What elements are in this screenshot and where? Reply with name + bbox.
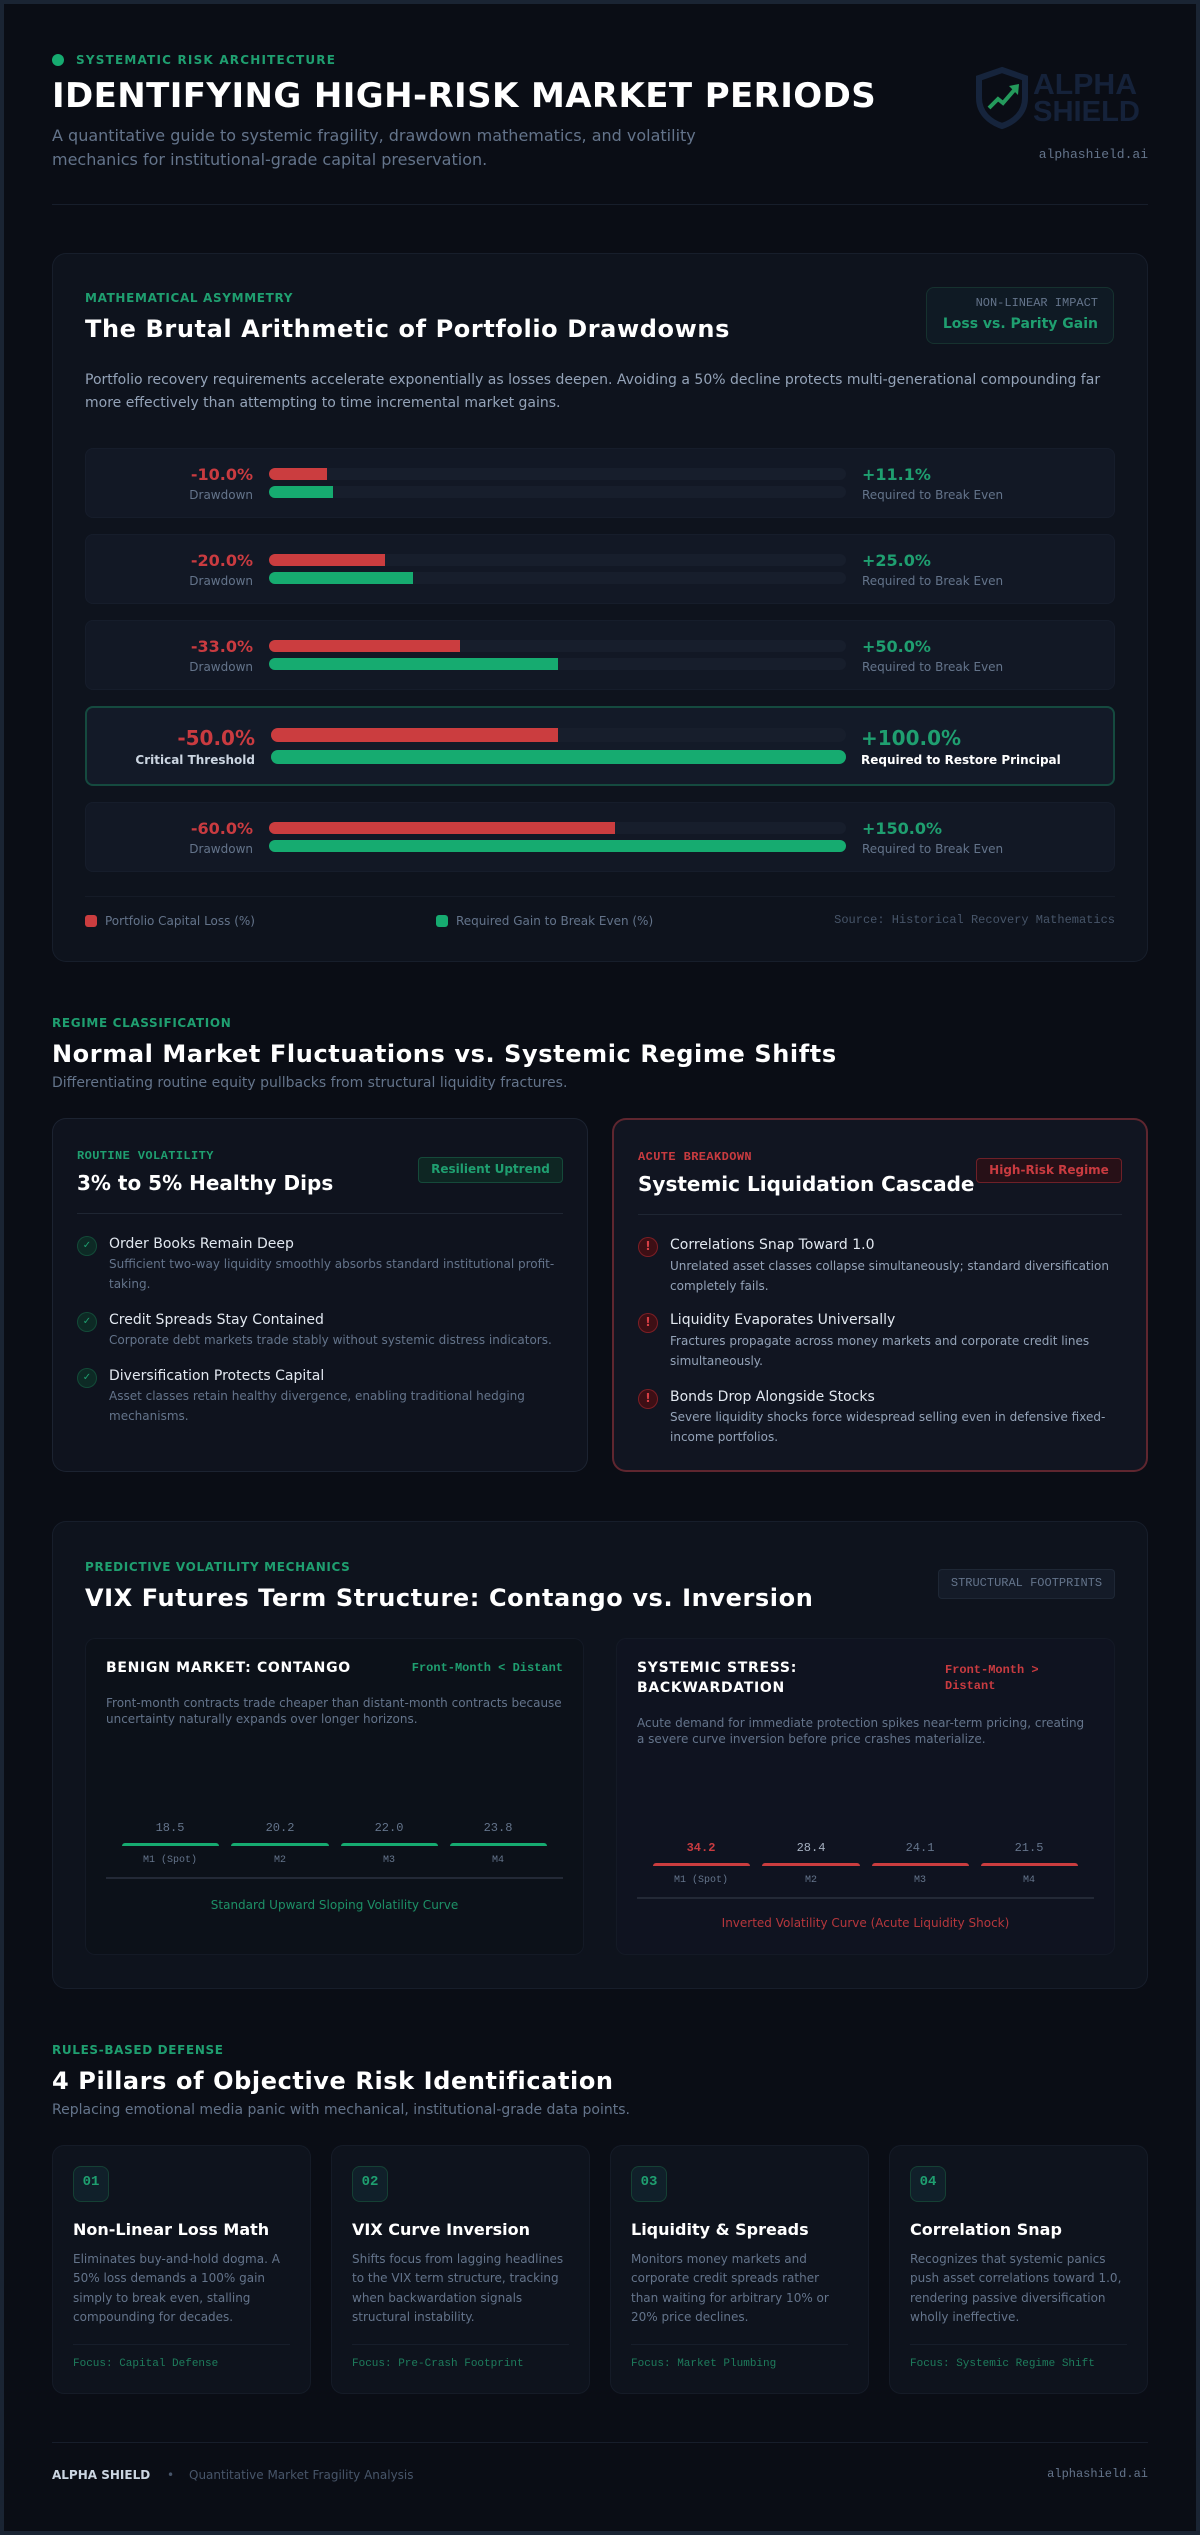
icon: alert	[638, 1389, 658, 1409]
card: pillar 01: Focus: Capital Defense	[73, 2358, 218, 2370]
item: credit spreads	[77, 1312, 552, 1347]
panel: VIX term structure	[52, 1521, 1148, 1989]
footer: alphashield.ai	[1047, 2467, 1148, 2481]
card: pillar 03: Liquidity & Spreads	[631, 2220, 809, 2239]
curve chart: contango: 20.2	[266, 1821, 294, 1835]
curve chart: backwardation	[637, 1841, 1094, 1899]
intro paragraph: more effectively than attempting to time incremental market gains.	[85, 395, 560, 411]
panel heading: VIX Futures Term Structure: Contango vs. Inversion	[85, 1584, 813, 1612]
badge: resilient uptrend	[418, 1157, 563, 1183]
row: -33% drawdown: Drawdown	[189, 660, 253, 674]
chart panel: backwardation: BACKWARDATION	[637, 1680, 785, 1696]
eyebrow with status dot: SYSTEMATIC RISK ARCHITECTURE	[76, 53, 336, 67]
row: -20% drawdown: -20.0%	[191, 551, 253, 570]
chart caption: Standard Upward Sloping Volatility Curve	[211, 1898, 458, 1912]
panel: portfolio drawdowns	[52, 253, 1148, 962]
item: bonds: Severe liquidity shocks force widespread selling even in defensive fixed-	[670, 1410, 1105, 1424]
section heading: regime classification	[52, 1016, 837, 1091]
legend: Portfolio Capital Loss (%)	[105, 914, 255, 928]
curve chart: backwardation: 34.2	[687, 1841, 715, 1855]
chart panel: contango	[85, 1638, 584, 1955]
subtitle: A quantitative guide to systemic fragility, drawdown mathematics, and volatility	[52, 126, 696, 145]
row: -20% drawdown	[85, 534, 1115, 604]
item: order books	[77, 1236, 554, 1291]
chart panel: contango: Front-month contracts trade cheaper than distant-month contracts because	[106, 1696, 562, 1710]
chart caption: Inverted Volatility Curve (Acute Liquidity Shock)	[722, 1916, 1009, 1930]
card: pillar 02: Shifts focus from lagging headlines	[352, 2252, 563, 2266]
icon: alert: !	[645, 1391, 651, 1405]
curve chart: contango: M3	[383, 1855, 395, 1866]
item: liquidity	[638, 1312, 1089, 1368]
item: correlations	[638, 1237, 1109, 1293]
card: pillar 02: structural instability.	[352, 2310, 475, 2324]
item: order books: Order Books Remain Deep	[109, 1236, 294, 1252]
item: diversification	[77, 1368, 525, 1423]
badge: high-risk regime: High-Risk Regime	[989, 1163, 1109, 1177]
footer	[52, 2442, 1148, 2492]
row: -10% drawdown: Drawdown	[189, 488, 253, 502]
row: -10% drawdown	[85, 448, 1115, 518]
card: pillar 01: 01	[83, 2174, 99, 2190]
icon: check: ✓	[83, 1240, 91, 1251]
card: pillar 01: Eliminates buy-and-hold dogma. A	[73, 2252, 280, 2266]
curve chart: backwardation: M1 (Spot)	[674, 1875, 728, 1886]
item: credit spreads: Corporate debt markets trade stably without systemic distress indicators.	[109, 1333, 552, 1347]
curve chart: contango: M4	[492, 1855, 504, 1866]
title: IDENTIFYING HIGH-RISK MARKET PERIODS	[52, 76, 876, 116]
icon: alert	[638, 1313, 658, 1333]
chart panel: contango: uncertainty naturally expands over longer horizons.	[106, 1712, 418, 1726]
item: credit spreads: Credit Spreads Stay Contained	[109, 1312, 324, 1328]
curve chart: contango: M1 (Spot)	[143, 1855, 197, 1866]
card: pillar 04: wholly ineffective.	[910, 2310, 1019, 2324]
badge: resilient uptrend: Resilient Uptrend	[431, 1162, 550, 1176]
row: -50% critical threshold: Required to Restore Principal	[861, 753, 1061, 767]
legend	[85, 913, 1115, 928]
card: pillar 03: 20% price declines.	[631, 2310, 748, 2324]
card: pillar 03: than waiting for arbitrary 10% or	[631, 2291, 829, 2305]
icon: check	[77, 1368, 97, 1388]
card: pillar 02: Focus: Pre-Crash Footprint	[352, 2358, 524, 2370]
curve chart: contango: 22.0	[375, 1821, 403, 1835]
chart panel: backwardation: Front-Month >	[945, 1663, 1039, 1677]
card: pillar 01: simply to break even, stalling	[73, 2291, 250, 2305]
chart panel: backwardation	[616, 1638, 1115, 1955]
row: -60% drawdown	[85, 802, 1115, 872]
badge: high-risk regime	[976, 1158, 1122, 1183]
chart panel: backwardation: Distant	[945, 1679, 995, 1693]
panel heading	[85, 1560, 813, 1612]
chart panel: backwardation: SYSTEMIC STRESS:	[637, 1660, 797, 1676]
item: diversification: Asset classes retain healthy divergence, enabling traditional hedging	[109, 1389, 525, 1403]
card: pillar 04: rendering passive diversification	[910, 2291, 1106, 2305]
row: -60% drawdown: -60.0%	[191, 819, 253, 838]
section heading: rules-based defense	[52, 2043, 630, 2118]
card: pillar 04: Correlation Snap	[910, 2220, 1062, 2239]
panel heading: MATHEMATICAL ASYMMETRY	[85, 291, 293, 305]
card: pillar 02: VIX Curve Inversion	[352, 2220, 530, 2239]
row: -10% drawdown: +11.1%	[862, 465, 931, 484]
card: pillar 04: Recognizes that systemic panics	[910, 2252, 1106, 2266]
item: liquidity: Liquidity Evaporates Universally	[670, 1312, 895, 1328]
card: pillar 03: corporate credit spreads rather	[631, 2271, 819, 2285]
row: -33% drawdown: -33.0%	[191, 637, 253, 656]
item: order books: Sufficient two-way liquidity smoothly absorbs standard institutional profit-	[109, 1257, 554, 1271]
row: -10% drawdown: Required to Break Even	[862, 488, 1003, 502]
icon: alert	[638, 1237, 658, 1257]
row: -20% drawdown: Drawdown	[189, 574, 253, 588]
item: correlations: Correlations Snap Toward 1.0	[670, 1237, 874, 1253]
section heading: regime classification: REGIME CLASSIFICATION	[52, 1016, 231, 1030]
curve chart: contango: 23.8	[484, 1821, 512, 1835]
card: pillar 03: 03	[641, 2174, 657, 2190]
card: pillar 04: 04	[920, 2174, 936, 2190]
card: pillar 03: Focus: Market Plumbing	[631, 2358, 776, 2370]
row: -50% critical threshold	[85, 706, 1115, 786]
item: correlations: completely fails.	[670, 1279, 769, 1293]
curve chart: backwardation: M4	[1023, 1875, 1035, 1886]
card: pillar 04: push asset correlations toward 1.0,	[910, 2271, 1121, 2285]
card: pillar 02: when backwardation signals	[352, 2291, 522, 2305]
row: -33% drawdown: +50.0%	[862, 637, 931, 656]
card heading: ACUTE BREAKDOWN	[638, 1150, 752, 1164]
chart panel: contango: Front-Month < Distant	[412, 1661, 563, 1675]
item: bonds: income portfolios.	[670, 1430, 778, 1444]
card: pillar 04: Focus: Systemic Regime Shift	[910, 2358, 1095, 2370]
tag: structural footprints: STRUCTURAL FOOTPRINTS	[951, 1576, 1102, 1590]
footer: ALPHA SHIELD	[52, 2468, 150, 2482]
panel heading: PREDICTIVE VOLATILITY MECHANICS	[85, 1560, 350, 1574]
tag: structural footprints	[938, 1569, 1115, 1599]
card: pillar 01: Non-Linear Loss Math	[73, 2220, 269, 2239]
badge: non-linear impact	[926, 287, 1114, 344]
item: bonds	[638, 1389, 1105, 1444]
card: pillar 02: 02	[362, 2174, 378, 2190]
card: pillar 01: compounding for decades.	[73, 2310, 233, 2324]
panel: routine volatility	[52, 1118, 588, 1472]
card: pillar 03	[610, 2145, 869, 2394]
subtitle	[52, 126, 696, 169]
badge: non-linear impact: Loss vs. Parity Gain	[943, 316, 1098, 332]
row: -33% drawdown: Required to Break Even	[862, 660, 1003, 674]
row: -50% critical threshold: +100.0%	[861, 726, 961, 750]
source note: Source: Historical Recovery Mathematics	[834, 913, 1115, 927]
footer: Quantitative Market Fragility Analysis	[189, 2468, 414, 2482]
icon: check: ✓	[83, 1316, 91, 1327]
item: diversification: Diversification Protects Capital	[109, 1368, 324, 1384]
row: -10% drawdown: -10.0%	[191, 465, 253, 484]
intro paragraph: Portfolio recovery requirements accelerate exponentially as losses deepen. Avoiding a 50% decline protects multi-generational compounding far	[85, 372, 1100, 388]
item: bonds: Bonds Drop Alongside Stocks	[670, 1389, 875, 1405]
section heading: rules-based defense: RULES-BASED DEFENSE	[52, 2043, 224, 2057]
curve chart: backwardation: 21.5	[1015, 1841, 1043, 1855]
section heading: rules-based defense: 4 Pillars of Objective Risk Identification	[52, 2067, 614, 2095]
logo: Alpha Shield: SHIELD	[1033, 96, 1140, 128]
icon: check: ✓	[83, 1372, 91, 1383]
intro paragraph	[85, 372, 1100, 411]
card heading: Systemic Liquidation Cascade	[638, 1172, 974, 1196]
item: correlations: Unrelated asset classes collapse simultaneously; standard diversification	[670, 1259, 1109, 1273]
section heading: regime classification: Normal Market Fluctuations vs. Systemic Regime Shifts	[52, 1040, 837, 1068]
curve chart: backwardation: 28.4	[797, 1841, 825, 1855]
footer: •	[167, 2468, 174, 2482]
card heading	[638, 1150, 974, 1196]
chart panel: backwardation: Acute demand for immediate protection spikes near-term pricing, creating	[637, 1716, 1084, 1730]
icon: alert: !	[645, 1239, 651, 1253]
row: -33% drawdown	[85, 620, 1115, 690]
item: order books: taking.	[109, 1277, 150, 1291]
card: pillar 04	[889, 2145, 1148, 2394]
card: pillar 02: to the VIX term structure, tracking	[352, 2271, 559, 2285]
logo: Alpha Shield	[976, 67, 1140, 129]
row: -20% drawdown: +25.0%	[862, 551, 931, 570]
badge: non-linear impact: NON-LINEAR IMPACT	[976, 296, 1098, 310]
website: alphashield.ai	[1039, 147, 1148, 162]
card heading: ROUTINE VOLATILITY	[77, 1149, 214, 1163]
card heading	[77, 1149, 333, 1195]
icon: check	[77, 1236, 97, 1256]
panel heading	[85, 291, 730, 343]
item: liquidity: simultaneously.	[670, 1354, 763, 1368]
row: -60% drawdown: +150.0%	[862, 819, 942, 838]
curve chart: contango	[106, 1821, 563, 1879]
icon: check	[77, 1312, 97, 1332]
card heading: 3% to 5% Healthy Dips	[77, 1171, 333, 1195]
curve chart: backwardation: M3	[914, 1875, 926, 1886]
item: diversification: mechanisms.	[109, 1409, 189, 1423]
section heading: rules-based defense: Replacing emotional media panic with mechanical, institutional-grade data points.	[52, 2102, 630, 2118]
legend: Required Gain to Break Even (%)	[456, 914, 653, 928]
icon: alert: !	[645, 1315, 651, 1329]
curve chart: backwardation: 24.1	[906, 1841, 934, 1855]
card: pillar 02	[331, 2145, 590, 2394]
row: -60% drawdown: Drawdown	[189, 842, 253, 856]
header	[52, 53, 1148, 169]
card: pillar 01: 50% loss demands a 100% gain	[73, 2271, 265, 2285]
logo: Alpha Shield: ALPHA	[1033, 69, 1137, 101]
row: -60% drawdown: Required to Break Even	[862, 842, 1003, 856]
chart panel: backwardation: a severe curve inversion before price crashes materialize.	[637, 1732, 986, 1746]
row: -50% critical threshold: Critical Threshold	[135, 753, 255, 767]
item: liquidity: Fractures propagate across money markets and corporate credit lines	[670, 1334, 1089, 1348]
curve chart: backwardation: M2	[805, 1875, 817, 1886]
card: pillar 01	[52, 2145, 311, 2394]
section heading: regime classification: Differentiating routine equity pullbacks from structural liquidity fractures.	[52, 1075, 567, 1091]
chart panel: contango: BENIGN MARKET: CONTANGO	[106, 1660, 351, 1676]
curve chart: contango: M2	[274, 1855, 286, 1866]
curve chart: contango: 18.5	[156, 1821, 184, 1835]
row: -50% critical threshold: -50.0%	[177, 726, 255, 750]
subtitle: mechanics for institutional-grade capital preservation.	[52, 150, 487, 169]
card: pillar 03: Monitors money markets and	[631, 2252, 807, 2266]
panel heading: The Brutal Arithmetic of Portfolio Drawdowns	[85, 315, 730, 343]
row: -20% drawdown: Required to Break Even	[862, 574, 1003, 588]
panel: acute breakdown	[612, 1118, 1148, 1472]
